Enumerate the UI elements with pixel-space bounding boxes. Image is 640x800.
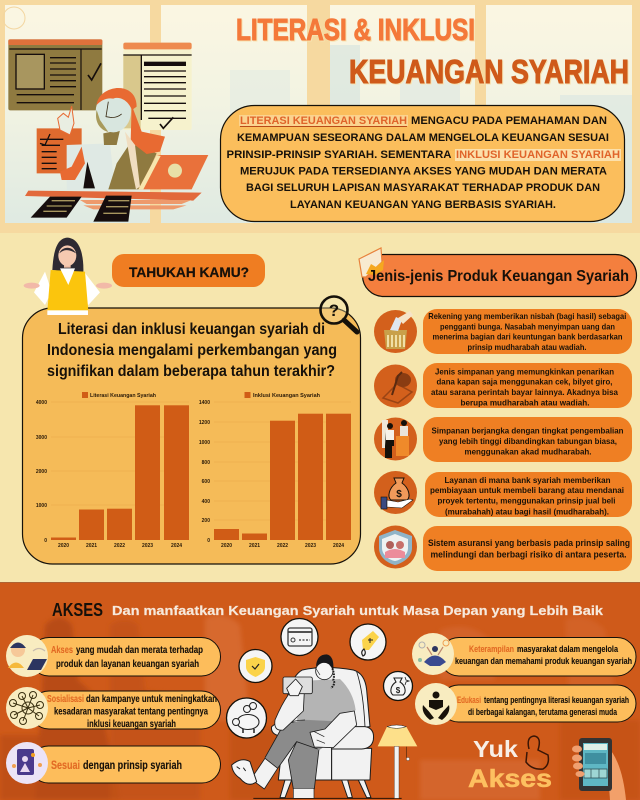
text block: definition: LAYANAN KEUANGAN YANG BERBASIS SYARIAH. [290,199,556,211]
panel: produk 5: Sistem asuransi yang berbasis pada prinsip saling [428,538,630,548]
bar chart: inklusi keuangan syariah: 800 [202,460,210,466]
panel: produk 3: menggunakan akad mudharabah. [464,448,592,457]
icon: magnifier with question mark: ? [329,301,339,320]
bar chart: inklusi keuangan syariah: Inklusi Keuangan Syariah [253,393,320,399]
bar chart: inklusi keuangan syariah: 1000 [199,440,210,446]
text block: card heading [47,321,337,380]
icon: credit card [281,618,318,656]
heading: tahukah kamu [112,254,265,287]
text block: definition: KEMAMPUAN SESEORANG DALAM MENGELOLA KEUANGAN SESUAI [237,132,609,144]
panel: produk 4: pembiayaan untuk membeli barang atau mendanai [430,486,624,495]
title [236,12,630,92]
panel: sesuai pill: Sesuai [51,760,80,772]
heading: akses dan manfaatkan: Dan manfaatkan Keuangan Syariah untuk Masa Depan yang Lebih Baik [112,603,604,618]
illustration: person sitting in armchair [232,654,417,798]
panel: akses pill [6,635,220,677]
text block: definition: MERUJUK PADA TERSEDIANYA AKSES YANG MUDAH DAN MERATA [240,166,607,178]
bar chart: inklusi keuangan syariah: 2021 [249,543,260,549]
bar chart: literasi keuangan syariah: 4000 [36,400,47,406]
bar chart: literasi keuangan syariah: 2020 [58,543,69,549]
panel: produk 5 [374,526,632,571]
bar chart: inklusi keuangan syariah: 1200 [199,420,210,426]
panel: edukasi pill: Edukasi [457,695,481,706]
panel: produk 2: dana kapan saja menggunakan cek, bilyet giro, [436,378,612,387]
bar chart: inklusi keuangan syariah: 0 [207,538,210,544]
bar chart: inklusi keuangan syariah: 400 [202,499,210,505]
icon: piggy bank [226,698,266,738]
panel: header scene [0,0,640,233]
panel: produk 4: $ [396,489,402,500]
icon: pointing hand [526,736,548,769]
heading: akses dan manfaatkan: AKSES [52,600,103,620]
icon: money bag [384,672,412,700]
bar chart: literasi keuangan syariah: 3000 [36,435,47,441]
text: yuk: Yuk [473,736,518,762]
bar chart: literasi keuangan syariah [36,392,189,549]
bar chart: inklusi keuangan syariah: 1400 [199,400,210,406]
panel: akses pill: yang mudah dan merata terhadap [76,644,203,656]
icon: money bag: $ [396,686,401,695]
bar chart: literasi keuangan syariah: 2022 [114,543,125,549]
bar chart: inklusi keuangan syariah [199,392,351,549]
text block: definition: INKLUSI KEUANGAN SYARIAH [456,149,620,161]
panel: sosialisasi pill: dan kampanye untuk meningkatkan [86,693,217,705]
panel: produk 4 [374,471,632,517]
panel: edukasi pill [415,683,636,725]
panel: sesuai pill: dengan prinsip syariah [83,760,182,772]
panel: produk 4: proyek tertentu, menggunakan prinsip jual beli [438,497,616,506]
bar chart: inklusi keuangan syariah: 2022 [277,543,288,549]
bar chart: inklusi keuangan syariah: 2023 [305,543,316,549]
text block: definition: MENGACU PADA PEMAHAMAN DAN [411,115,607,127]
panel: sesuai pill [6,742,220,784]
bar chart: literasi keuangan syariah: 2021 [86,543,97,549]
panel: akses pill: produk dan layanan keuangan syariah [56,658,199,670]
icon: hand holding phone [572,738,626,800]
text block: definition: LITERASI KEUANGAN SYARIAH [240,115,407,127]
panel: keterampilan pill [412,633,636,676]
icon: shield [239,650,272,682]
panel: produk 1 [374,309,632,354]
panel: produk 5: melindungi dan berbagi risiko di antara peserta. [430,549,626,559]
heading: akses dan manfaatkan [52,600,604,620]
bar chart: literasi keuangan syariah: 1000 [36,503,47,509]
panel: produk 2: Jenis simpanan yang memungkinkan penarikan [435,367,614,376]
panel: tahukah kamu card [22,308,360,564]
panel: sosialisasi pill: inklusi keuangan syariah [87,718,176,730]
panel: akses background [0,582,640,800]
panel: produk 4: Layanan di mana bank syariah memberikan [444,476,611,485]
bar chart: inklusi keuangan syariah: 200 [202,518,210,524]
illustration: woman at desk with documents [8,39,208,222]
panel: sosialisasi pill [6,687,220,730]
icon: girl shrugging [24,238,112,315]
heading: jenis-jenis produk keuangan syariah: Jenis-jenis Produk Keuangan Syariah [368,268,629,285]
bar chart: inklusi keuangan syariah: 600 [202,479,210,485]
bar chart: inklusi keuangan syariah: 2020 [221,543,232,549]
panel: akses pill: Akses [51,644,73,656]
text block: definition: BAGI SELURUH LAPISAN MASYARAKAT TERHADAP PRODUK DAN [246,182,600,194]
bar chart: inklusi keuangan syariah: 2024 [333,543,344,549]
icon: magnifier with question mark [320,296,357,332]
panel: keterampilan pill: Keterampilan [469,644,514,655]
bar chart: literasi keuangan syariah: 0 [44,538,47,544]
heading: jenis-jenis produk keuangan syariah [359,248,636,296]
panel: produk 3: Simpanan berjangka dengan tingkat pengembalian [432,427,624,436]
panel: produk 1: prinsip mudharabah atau wadiah. [468,343,586,352]
text block: card heading: Literasi dan inklusi keuangan syariah di [58,321,325,338]
bar chart: literasi keuangan syariah: 2023 [142,543,153,549]
panel: sosialisasi pill: kesadaran masyarakat tentang pentingnya [54,706,208,718]
bar chart: literasi keuangan syariah: 2000 [36,469,47,475]
text block: card heading: Indonesia mengalami perkembangan yang [47,342,337,359]
heading: tahukah kamu: TAHUKAH KAMU? [129,264,249,280]
text block: definition: PRINSIP-PRINSIP SYARIAH. SEMENTARA [226,149,452,161]
bar chart: literasi keuangan syariah: Literasi Keuangan Syariah [90,393,156,399]
text block: definition [220,106,624,222]
panel: produk 2 [374,363,632,408]
panel: produk 2: atau sarana perintah bayar lainnya. Akadnya bisa [431,388,618,397]
panel: produk 4: (murabahah) atau bagi hasil (mudharabah). [445,507,609,516]
panel: sosialisasi pill: Sosialisasi [47,693,84,705]
panel: produk 1: menerima bagian dari keuntungan bank berdasarkan [432,332,623,342]
panel: produk 2: berupa mudharabah atau wadiah. [460,398,590,407]
panel: produk 3: yang lebih tinggi dibandingkan tabungan biasa, [439,437,617,446]
title: LITERASI & INKLUSI [236,12,475,47]
title: LITERASI & INKLUSI [237,13,476,48]
panel: produk 1: pengganti bunga. Nasabah menyimpan uang dan [440,322,615,332]
text: akses: Akses [468,765,552,793]
bar chart: literasi keuangan syariah: 2024 [171,543,182,549]
icon: price tag [350,624,386,660]
text block: card heading: signifikan dalam beberapa tahun terakhir? [47,363,335,380]
panel: produk 3 [374,417,632,462]
panel: produk 1: Rekening yang memberikan nisbah (bagi hasil) sebagai [428,312,626,321]
